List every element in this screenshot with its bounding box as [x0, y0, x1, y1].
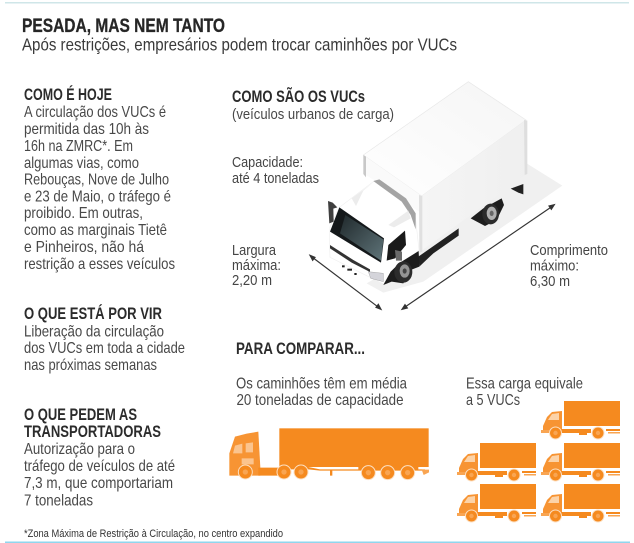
label: comprimento máximo: máximo: [530, 258, 579, 274]
icon: orange VUC middle left [457, 443, 536, 481]
bottom rule [5, 542, 630, 543]
icon: orange semi truck [229, 428, 429, 480]
text block: como é hoje: e Pinheiros, não há [24, 239, 144, 256]
heading: o que pedem as transportadoras: TRANSPORTADORAS [24, 423, 161, 441]
heading: como são os VUCs [232, 86, 394, 123]
label: capacidade [232, 155, 319, 187]
arrow: length [402, 205, 554, 309]
text block: como é hoje: A circulação dos VUCs é [24, 104, 166, 121]
text block: como é hoje [24, 104, 175, 273]
icon: orange VUC top [541, 401, 620, 439]
truck mirrors [328, 201, 402, 261]
footnote: *Zona Máxima de Restrição à Circulação, no centro expandido [24, 528, 283, 540]
icon: orange VUC bottom left [457, 484, 536, 522]
text block: como é hoje: Rebouças, Nove de Julho [24, 172, 169, 188]
text: equivalent VUCs: Essa carga equivale [466, 376, 583, 392]
heading: como são os VUCs: (veículos urbanos de carga) [232, 106, 394, 123]
label: capacidade: até 4 toneladas [232, 171, 319, 187]
label: capacidade: Capacidade: [232, 155, 303, 171]
truck rear detail [511, 184, 523, 194]
text block: o que pedem as transportadoras: tráfego de veículos de até [24, 458, 175, 475]
label: largura máxima [232, 243, 281, 289]
text block: o que está por vir [24, 324, 185, 374]
text: caminhões capacity: Os caminhões têm em média [236, 376, 407, 392]
text block: como é hoje: 16h na ZMRC*. Em [24, 138, 133, 155]
text block: o que está por vir: Liberação da circulação [24, 324, 164, 340]
label: largura máxima: máxima: [232, 258, 281, 274]
text block: o que pedem as transportadoras [24, 441, 175, 510]
heading: como é hoje: COMO É HOJE [24, 85, 112, 104]
text block: o que pedem as transportadoras: 7 toneladas [24, 492, 93, 510]
heading: o que pedem as transportadoras [24, 406, 161, 441]
text: caminhões capacity: 20 toneladas de capacidade [236, 392, 404, 409]
truck chassis [418, 228, 459, 267]
label: comprimento máximo [530, 243, 608, 290]
icon: orange VUC middle right [541, 443, 620, 481]
panel: como é hoje [24, 85, 175, 273]
heading: o que está por vir: O QUE ESTÁ POR VIR [24, 304, 162, 323]
top rule [5, 2, 629, 4]
heading: para comparar: PARA COMPARAR... [236, 340, 365, 358]
arrow: width [310, 255, 381, 309]
text block: o que está por vir: dos VUCs em toda a cidade [24, 340, 185, 357]
text: equivalent VUCs: a 5 VUCs [466, 392, 520, 409]
label: largura máxima: Largura [232, 243, 277, 259]
text block: como é hoje: algumas vias, como [24, 155, 139, 172]
truck ground shadow [367, 163, 562, 293]
truck cab [329, 179, 419, 284]
truck front wheel [383, 251, 419, 285]
text block: como é hoje: proibido. Em outras, [24, 205, 143, 222]
text block: o que está por vir: nas próximas semanas [24, 357, 157, 374]
text block: como é hoje: e 23 de Maio, o tráfego é [24, 188, 171, 206]
text block: como é hoje: restrição a esses veículos [24, 256, 175, 273]
label: comprimento máximo: Comprimento [530, 243, 608, 259]
heading: o que pedem as transportadoras: O QUE PEDEM AS [24, 406, 137, 424]
subtitle: Após restrições, empresários podem trocar caminhões por VUCs [22, 34, 457, 54]
text block: como é hoje: permitida das 10h às [24, 121, 149, 138]
icon: orange VUC bottom right [541, 484, 620, 522]
panel: o que está por vir [24, 304, 185, 374]
text block: o que pedem as transportadoras: 7,3 m, que comportariam [24, 475, 173, 492]
text block: como é hoje: como as marginais Tietê [24, 222, 167, 239]
truck cargo box [363, 82, 527, 253]
text: caminhões capacity [236, 376, 407, 409]
heading: como são os VUCs: COMO SÃO OS VUCs [232, 86, 365, 106]
text block: o que pedem as transportadoras: Autorização para o [24, 441, 135, 458]
illustration: white VUC truck [310, 82, 562, 309]
label: comprimento máximo: 6,30 m [530, 274, 570, 290]
panel: o que pedem as transportadoras [24, 406, 175, 510]
truck rear wheel [471, 198, 504, 226]
text: equivalent VUCs [466, 376, 583, 409]
title: PESADA, MAS NEM TANTO [22, 15, 225, 37]
label: largura máxima: 2,20 m [232, 273, 272, 289]
